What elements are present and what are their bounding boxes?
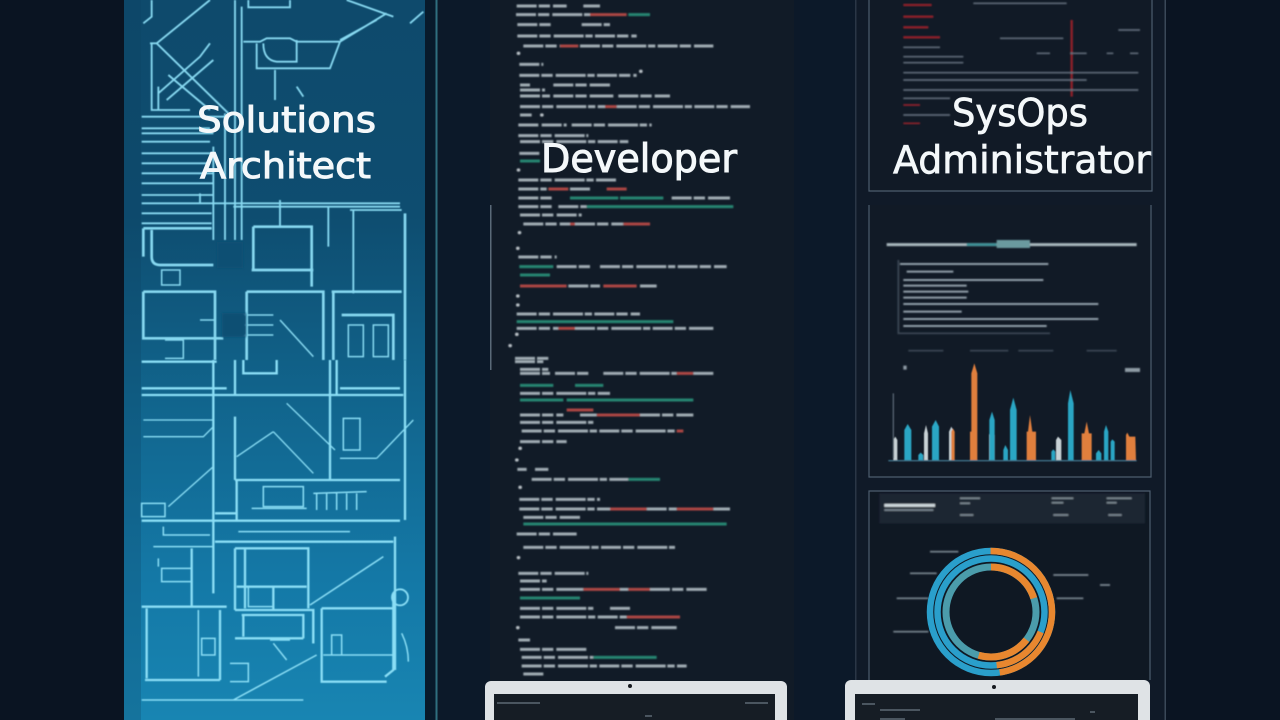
blueprint floor plan lower	[142, 360, 413, 700]
dashboard: log panel	[869, 0, 1152, 229]
panel: sysops administrator dashboards	[855, 0, 1166, 720]
laptop: sysops	[845, 680, 1150, 720]
blueprint floor plan upper	[142, 0, 423, 360]
panel: solutions architect blueprint	[124, 0, 438, 720]
sysops administrator label	[893, 91, 1151, 182]
developer label: Developer	[541, 137, 738, 182]
dashboard: donut panel	[869, 491, 1150, 680]
sysops administrator label: Administrator	[893, 138, 1151, 182]
bar chart	[888, 363, 1137, 461]
solutions architect label: Solutions	[197, 100, 376, 141]
blueprint smudges	[217, 242, 246, 337]
laptop: developer	[485, 681, 787, 720]
code lines	[510, 6, 750, 358]
panel: developer code listing	[490, 0, 794, 720]
dashboard: status and bar chart	[869, 205, 1151, 477]
solutions architect label: Architect	[200, 146, 371, 187]
solutions architect label	[197, 100, 376, 187]
donut chart	[930, 551, 1052, 673]
sysops administrator label: SysOps	[952, 91, 1088, 135]
column gutters	[437, 0, 855, 720]
